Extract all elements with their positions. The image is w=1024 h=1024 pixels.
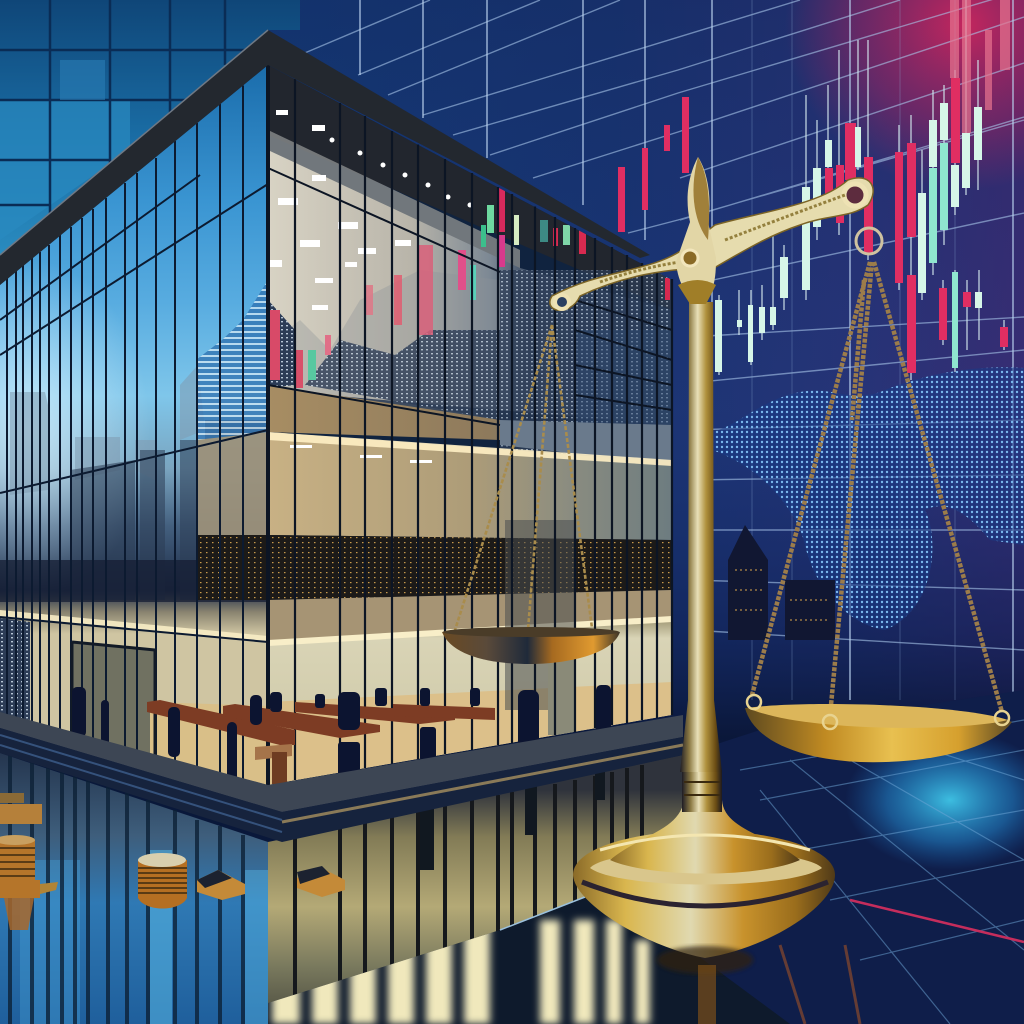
scale: center finial (676, 157, 716, 304)
lobby wall (268, 618, 672, 785)
lobby ceiling glow (0, 610, 268, 642)
background tower at upper left (0, 0, 300, 258)
reflected candles (268, 187, 670, 388)
warm floor (268, 432, 672, 540)
floor: reflective pavement (0, 753, 683, 1024)
building: left facade (0, 65, 268, 785)
scale: central pole (680, 302, 722, 772)
skyline reflection behind scale (728, 525, 835, 640)
tan lower band (268, 590, 672, 642)
scale: left pan (442, 627, 620, 664)
reflected striped tower (196, 280, 268, 440)
central column (505, 520, 575, 710)
dark upper ceiling (270, 66, 644, 270)
bright haze (0, 274, 136, 560)
scale: base (573, 770, 835, 1024)
scale: left pan chains (455, 325, 592, 630)
entrance door (74, 644, 154, 753)
lobby floor (268, 682, 672, 785)
candlestick chart (618, 0, 1010, 380)
lobby people (72, 685, 611, 782)
scale: right pan (745, 695, 1012, 762)
dark city at lobby left (0, 618, 30, 720)
ceiling lights (268, 110, 472, 463)
scale: right pan chains (752, 228, 1002, 716)
building roof edge (0, 30, 650, 285)
reflected skyline in upper floor (283, 272, 500, 420)
coin stacks (0, 793, 345, 930)
building: right facade (266, 65, 672, 785)
scale: beam (550, 178, 873, 310)
bright upper floor interior (268, 150, 672, 425)
tan wall band (268, 385, 500, 440)
dotted world map (712, 367, 1024, 630)
dark mezzanine band (268, 535, 672, 600)
reflected skyline (10, 365, 205, 495)
floor: dark reflection area (268, 897, 800, 1024)
floor grid at lower right (683, 690, 1024, 1024)
building base platform (0, 712, 683, 842)
lobby floor (150, 702, 268, 785)
lobby furniture (147, 700, 495, 784)
